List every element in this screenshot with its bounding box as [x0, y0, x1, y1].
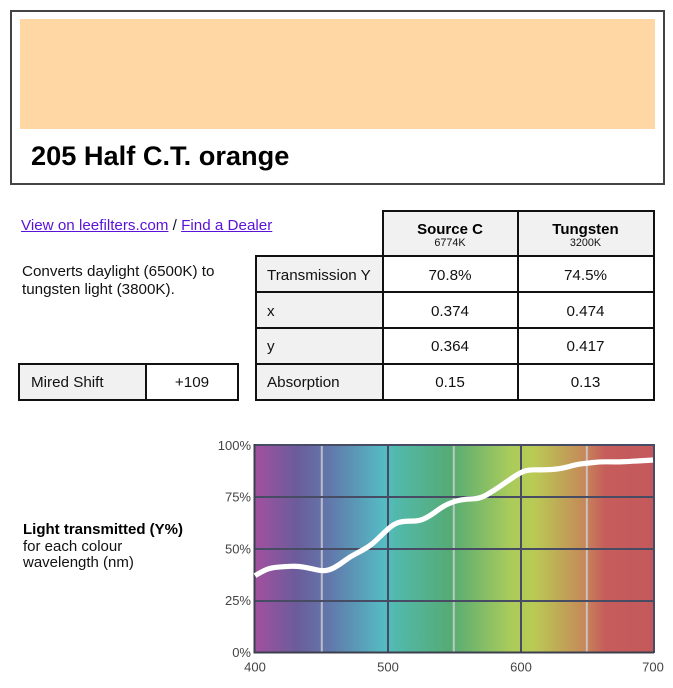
- x axis labels: 500: [377, 660, 399, 674]
- header: Tungsten: [518, 211, 653, 256]
- row label: Absorption: Absorption: [267, 374, 340, 391]
- row label: Transmission Y: Transmission Y: [267, 267, 371, 284]
- mired shift value: +109: [175, 374, 209, 391]
- spectrum background: [255, 445, 653, 652]
- description: [22, 263, 214, 298]
- chart caption: [23, 521, 183, 571]
- transmission curve: [255, 460, 653, 576]
- value: Source C absorption: 0.15: [435, 374, 465, 391]
- x axis labels: 400: [244, 660, 266, 674]
- title: 205 Half C.T. orange: [31, 140, 289, 171]
- row label: y: [255, 328, 383, 364]
- row label: y: y: [267, 338, 275, 355]
- mired shift table: [18, 363, 239, 401]
- chart caption: Light transmitted (Y%): [23, 521, 183, 538]
- value: Tungsten absorption: 0.13: [571, 374, 600, 391]
- x axis labels: 600: [510, 660, 532, 674]
- y axis labels: 25%: [225, 593, 251, 608]
- value: Source C y: 0.364: [431, 338, 469, 355]
- header panel: [10, 10, 665, 185]
- y axis labels: [218, 438, 251, 660]
- mired shift label: [20, 365, 145, 399]
- value: Tungsten y: 0.417: [566, 338, 604, 355]
- value: Source C x: 0.374: [431, 303, 469, 320]
- row label: x: x: [267, 303, 275, 320]
- description: Converts daylight (6500K) to: [22, 263, 214, 280]
- x axis labels: [244, 660, 664, 674]
- row label: Transmission Y: [255, 256, 383, 292]
- header: Source C: 6774K: [434, 237, 466, 249]
- header: Tungsten: Tungsten: [552, 221, 619, 238]
- x axis labels: 700: [642, 660, 664, 674]
- links: View on leefilters.com / Find a Dealer: [21, 217, 272, 234]
- data table: [255, 210, 655, 401]
- value: Tungsten transmission: 74.5%: [564, 267, 607, 284]
- y axis labels: 0%: [232, 645, 251, 660]
- header: Tungsten: 3200K: [570, 237, 601, 249]
- grid lines: [254, 444, 654, 654]
- header: Source C: Source C: [417, 221, 483, 238]
- value: Tungsten x: 0.474: [566, 303, 604, 320]
- description: tungsten light (3800K).: [22, 280, 175, 298]
- chart caption: wavelength (nm): [23, 554, 134, 571]
- colour swatch: [20, 19, 655, 129]
- header: Source C: [383, 211, 517, 256]
- row label: x: [255, 292, 383, 328]
- y axis labels: 75%: [225, 490, 251, 504]
- value: Source C transmission: 70.8%: [428, 267, 472, 284]
- chart caption: for each colour: [23, 538, 122, 554]
- mired shift label: Mired Shift: [31, 374, 104, 391]
- y axis labels: 50%: [225, 542, 251, 556]
- row label: Absorption: [255, 364, 383, 400]
- y axis labels: 100%: [218, 438, 251, 453]
